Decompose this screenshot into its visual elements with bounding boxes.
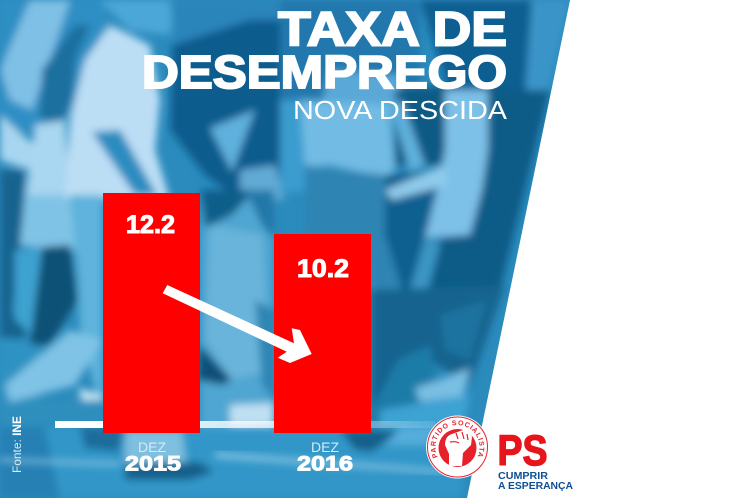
label: Dez 2016 (297, 439, 353, 476)
logo: PS wordmark and slogan: CUMPRIR (498, 471, 549, 482)
logo: PS wordmark and slogan: A ESPERANÇA (498, 481, 573, 492)
centre dark figure (170, 0, 276, 44)
background photo: crowd walking (0, 0, 570, 498)
bar: 2015: 12.2 (126, 211, 175, 239)
label: Dez 2015 (125, 439, 181, 476)
source note: Fonte: INE (10, 416, 24, 473)
logo: PS wordmark and slogan (498, 427, 573, 492)
right lower legs (371, 285, 505, 425)
title: TAXA DE (278, 4, 507, 56)
label: Dez 2016: DEZ (311, 439, 339, 455)
centre shirt and jeans (300, 100, 395, 178)
label: Dez 2015: 2015 (125, 452, 181, 476)
icon: raised fist (445, 430, 472, 466)
label: Dez 2016: 2016 (297, 452, 353, 476)
logo: PS wordmark and slogan: PS (498, 427, 548, 475)
left lower legs (20, 195, 100, 250)
arrow: downward trend (163, 285, 312, 363)
logo: Partido Socialista seal: PARTIDO SOCIALISTA (430, 420, 484, 458)
right figure (418, 0, 534, 96)
logo: Partido Socialista seal (426, 416, 488, 478)
label: Dez 2015: DEZ (138, 439, 166, 455)
title: DESEMPREGO (142, 46, 507, 98)
bar: 2016: 10.2 (297, 255, 349, 283)
ground (48, 428, 461, 496)
bar: 2015 (103, 193, 200, 433)
bar: 2016 (274, 234, 371, 433)
title: NOVA DESCIDA (293, 95, 508, 125)
axis line (55, 421, 435, 428)
title (142, 4, 508, 125)
top centre (280, 0, 420, 110)
top left figures (0, 0, 110, 130)
gap between bars (200, 190, 274, 430)
